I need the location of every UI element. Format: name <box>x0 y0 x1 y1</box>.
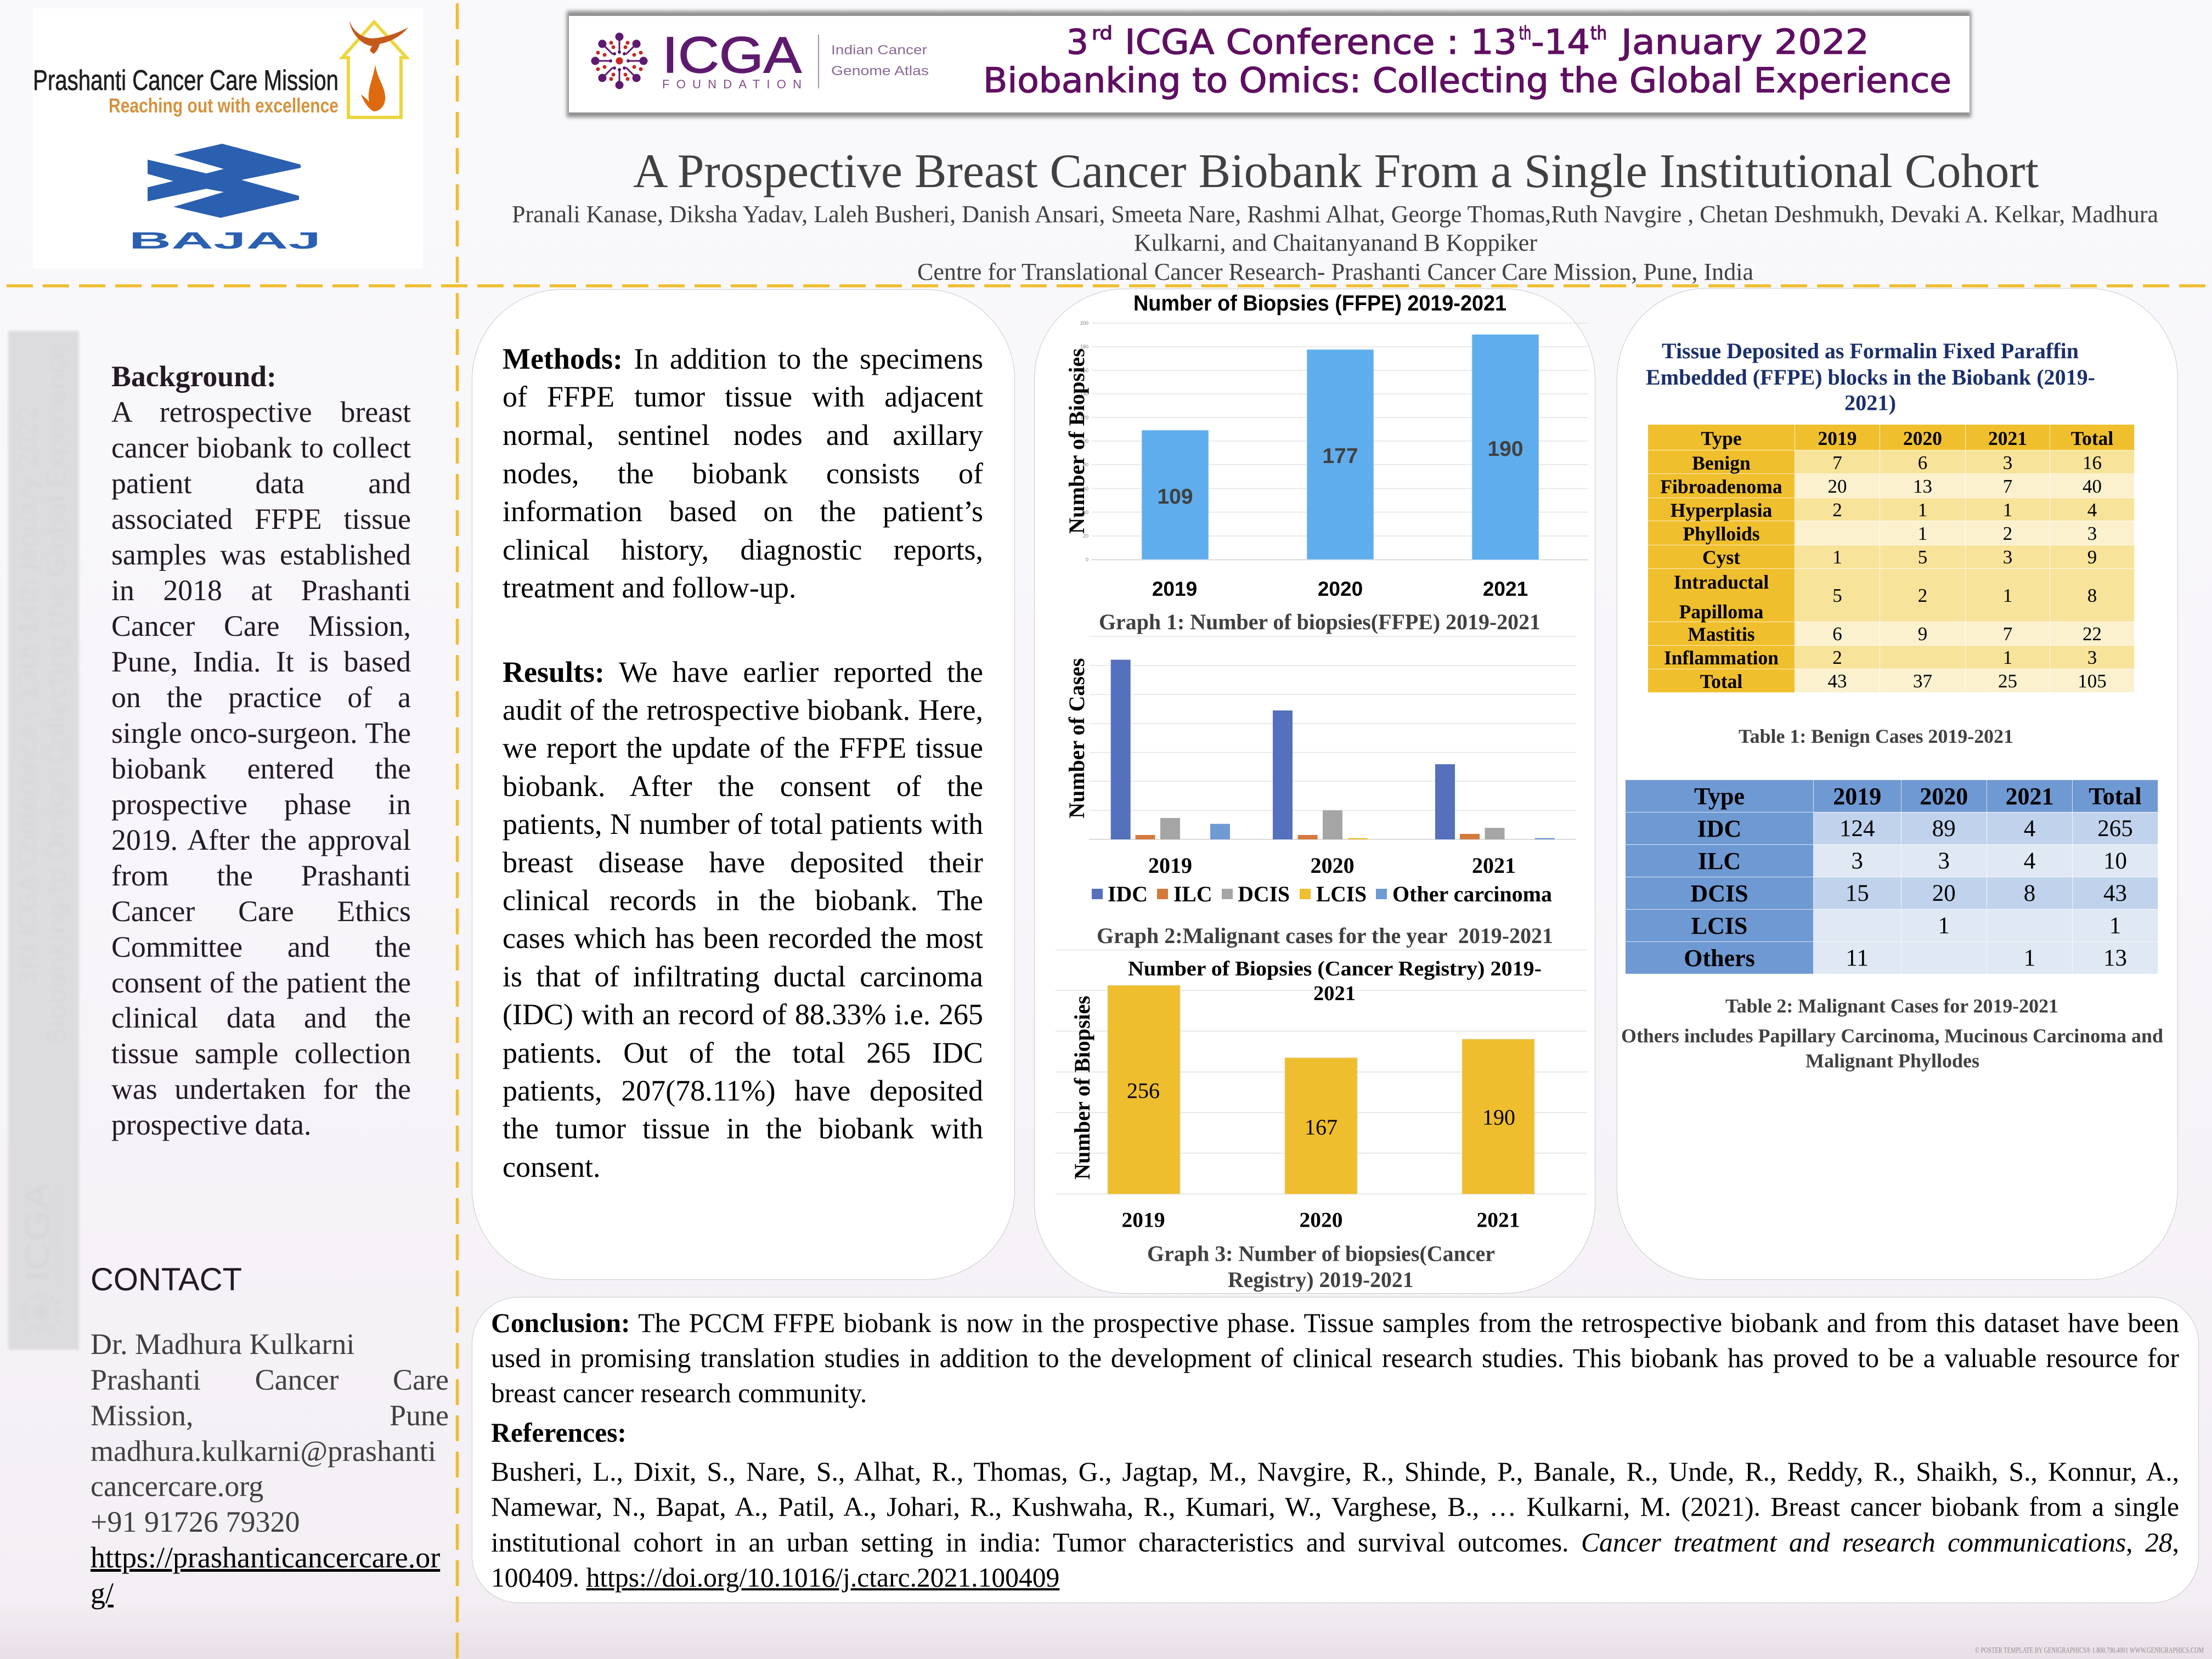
heading: contact: CONTACT <box>91 1262 242 1297</box>
caption: table 2 and note: Malignant Phyllodes <box>1805 1050 1979 1072</box>
bar chart: biopsies FFPE: 200 <box>1080 320 1088 326</box>
bar chart: biopsies FFPE: 140 <box>1080 391 1088 397</box>
bar chart: cancer registry: 2019 <box>1121 1208 1165 1232</box>
table: benign cases: Total <box>1700 670 1742 692</box>
text block: references: Namewar, N., Bapat, A., Patil, A., Johari, R., Kushwaha, R., Kumari, W., Varghese, B., … Kulkarni, M. (2021). Breast cancer biobank from a single <box>491 1492 2179 1522</box>
text block: contact details: cancercare.org <box>91 1470 263 1503</box>
text block: methods: of FFPE tumor tissue with adjacent <box>503 380 983 413</box>
caption: table 2 and note <box>1618 996 2178 1073</box>
table: benign cases: 9 <box>1918 623 1927 645</box>
text block: conclusion: used in promising translation studies in addition to the development of clinical research studies. This biobank has proved to be a valuable resource for <box>491 1343 2179 1373</box>
logo: Prashanti Cancer Care Mission: Prashanti Cancer Care Mission <box>33 65 338 97</box>
table: malignant cases: ILC <box>1698 848 1741 874</box>
text block: results: audit of the retrospective biobank. Here, <box>503 693 983 726</box>
table: benign cases: 3 <box>2087 523 2097 544</box>
text block: background: tissue sample collection <box>111 1037 411 1070</box>
text block: methods: information based on the patient’s <box>503 495 983 528</box>
table: malignant cases: 1 <box>2024 945 2035 971</box>
conference heading <box>983 22 1951 100</box>
panel: tables <box>1617 288 2178 1280</box>
text block: contact details: g/ <box>91 1577 114 1610</box>
table: benign cases: Type <box>1701 427 1742 449</box>
bar chart: biopsies FFPE: 80 <box>1083 462 1088 467</box>
caption: graph 3: Graph 3: Number of biopsies(Cancer <box>1147 1241 1495 1266</box>
text block: background: Pune, India. It is based <box>111 645 411 678</box>
text block: results: breast disease have deposited their <box>503 846 983 879</box>
text block: methods <box>503 342 983 604</box>
table: benign cases: 8 <box>2087 585 2097 606</box>
y axis title: Number of Biopsies <box>1070 996 1094 1180</box>
text block: background: Background: <box>111 360 276 393</box>
conference heading: Biobanking to Omics: Collecting the Global Experience <box>983 60 1951 100</box>
table: malignant cases: 265 <box>2097 816 2133 842</box>
caption: graph 2: Graph 2:Malignant cases for the year 2019-2021 <box>1097 923 1553 948</box>
bar chart: biopsies FFPE: 0 <box>1086 557 1088 562</box>
text block: background: prospective data. <box>111 1108 311 1141</box>
table: benign cases: 6 <box>1832 623 1842 645</box>
bar chart: cancer registry: 256 <box>1127 1079 1160 1103</box>
authors: Pranali Kanase, Diksha Yadav, Laleh Busheri, Danish Ansari, Smeeta Nare, Rashmi Alhat, George Thomas,Ruth Navgire , Chetan Deshmukh, Devaki A. Kelkar, Madhura <box>512 200 2158 228</box>
logos panel: Prashanti and Bajaj <box>33 20 410 254</box>
bars <box>1108 985 1534 1194</box>
conference heading: th <box>1590 22 1607 44</box>
authors <box>512 200 2158 256</box>
table: malignant cases: 15 <box>1846 881 1869 906</box>
text block: contact details: Dr. Madhura Kulkarni <box>91 1328 354 1361</box>
logo: Bajaj: BAJAJ <box>129 228 321 254</box>
text block: background: prospective phase in <box>111 788 411 821</box>
legend: IDC <box>1108 882 1148 906</box>
table: benign cases: 40 <box>2083 476 2102 497</box>
chart title: Number of Biopsies (FFPE) 2019-2021 <box>1133 291 1506 315</box>
text block: background: on the practice of a <box>111 681 411 714</box>
table: benign cases: 22 <box>2083 623 2102 645</box>
table: benign cases: Intraductal <box>1674 571 1769 593</box>
bar chart: biopsies FFPE: 20 <box>1083 533 1088 539</box>
y axis title: Number of Cases <box>1064 658 1089 819</box>
text block: conclusion: Conclusion: The PCCM FFPE biobank is now in the prospective phase. Tissue samples from the retrospective biobank and from this dataset have been <box>491 1308 2179 1338</box>
bar chart: biopsies FFPE: 109 <box>1157 485 1193 509</box>
table: benign cases: 2021 <box>1988 427 2027 449</box>
text block: methods: clinical history, diagnostic reports, <box>503 533 983 566</box>
legend: DCIS <box>1238 882 1290 906</box>
ICGA Foundation wordmark: Genome Atlas <box>831 64 929 78</box>
text block: results: cases which has been recorded the most <box>503 922 983 955</box>
table: malignant cases: 2020 <box>1920 783 1968 810</box>
table: benign cases: Fibroadenoma <box>1660 476 1782 498</box>
ICGA Foundation wordmark <box>662 26 929 91</box>
text block: results <box>503 655 983 1183</box>
caption: table 1: Table 1: Benign Cases 2019-2021 <box>1739 725 2013 747</box>
table: benign cases: 105 <box>2078 670 2107 692</box>
text block: background: Cancer Care Ethics <box>111 895 411 928</box>
table: malignant cases: DCIS <box>1690 880 1748 907</box>
table: malignant cases: 13 <box>2103 945 2127 971</box>
text block: background <box>111 360 411 1141</box>
bar chart: biopsies FFPE: 100 <box>1080 438 1088 444</box>
text block: results: is that of infiltrating ductal carcinoma <box>503 960 983 993</box>
ICGA Foundation wordmark: ICGA <box>662 26 802 83</box>
table: benign cases: 1 <box>1918 499 1927 521</box>
table: malignant cases: 3 <box>1851 848 1863 874</box>
table: benign cases: 9 <box>2087 546 2097 568</box>
bar chart: malignant cases: 2021 <box>1472 853 1516 878</box>
table: benign cases: Benign <box>1692 452 1751 474</box>
logo: Bajaj <box>129 144 321 254</box>
conference heading: January 2022 <box>1619 22 1869 62</box>
table: benign cases <box>1647 424 2134 693</box>
text block: results: (IDC) with an record of 88.33% i.e. 265 <box>503 998 983 1031</box>
text block: background: patient data and <box>111 467 411 500</box>
panel: graphs <box>1034 289 1595 1294</box>
panel: methods and results <box>472 289 1015 1280</box>
text block: results: Results: We have earlier reported the <box>503 655 983 688</box>
text block: references: Busheri, L., Dixit, S., Nare, S., Alhat, R., Thomas, G., Jagtap, M., Navgire, R., Shinde, P., Banale, R., Unde, R., Reddy, R., Shaikh, S., Konnur, A., <box>491 1457 2179 1487</box>
text block: results: we report the update of the FFPE tissue <box>503 731 983 764</box>
chart title: Number of Biopsies (Cancer Registry) 2019- <box>1128 957 1542 980</box>
icon: ICGA flower <box>591 33 647 89</box>
table: malignant cases: 10 <box>2103 848 2127 874</box>
text block: results: consent. <box>503 1150 600 1183</box>
bar chart: biopsies FFPE <box>1064 291 1588 600</box>
table: benign cases: 1 <box>2003 647 2012 668</box>
table: benign cases: 2 <box>2003 523 2012 544</box>
table: benign cases: Phylloids <box>1683 523 1760 545</box>
table: benign cases: 2 <box>1832 647 1842 668</box>
text block: contact details <box>91 1328 449 1610</box>
ICGA Foundation wordmark: FOUNDATION <box>662 77 802 91</box>
text block: references <box>491 1454 2179 1595</box>
table: malignant cases: 8 <box>2024 881 2035 906</box>
table: benign cases: Inflammation <box>1664 647 1779 669</box>
text block: contact details: madhura.kulkarni@prashanti <box>91 1435 436 1468</box>
text block: background: biobank entered the <box>111 752 411 785</box>
text block: background: clinical data and the <box>111 1001 411 1034</box>
text block: methods: normal, sentinel nodes and axillary <box>503 419 983 452</box>
table: malignant cases: LCIS <box>1691 912 1747 939</box>
text block: results: the tumor tissue in the biobank with <box>503 1112 983 1145</box>
text block: background: in 2018 at Prashanti <box>111 574 411 607</box>
table: benign cases: 1 <box>2003 585 2012 606</box>
chart title <box>1128 957 1542 1005</box>
bar chart: biopsies FFPE: 190 <box>1487 437 1523 461</box>
bar chart: biopsies FFPE: 60 <box>1083 486 1088 492</box>
table: malignant cases: 1 <box>1938 913 1950 939</box>
chart title: 2021 <box>1313 982 1356 1005</box>
legend <box>1092 882 1552 906</box>
table: benign cases: 6 <box>1918 452 1927 473</box>
bars <box>1142 335 1539 560</box>
table: malignant cases: 4 <box>2024 848 2035 874</box>
y axis title: Number of Biopsies <box>1064 348 1089 534</box>
bar chart: biopsies FFPE: 2020 <box>1318 578 1363 600</box>
table: malignant cases: Total <box>2089 783 2142 810</box>
bar chart: cancer registry: 167 <box>1305 1115 1338 1139</box>
table: malignant cases: 1 <box>2109 913 2121 939</box>
table: benign cases: 13 <box>1913 476 1932 497</box>
heading: tissue deposited: Tissue Deposited as Formalin Fixed Paraffin <box>1662 338 2079 363</box>
text block: contact details: Mission, Pune <box>91 1399 449 1432</box>
table: malignant cases: Type <box>1694 783 1745 810</box>
logo: Prashanti Cancer Care Mission <box>33 21 408 117</box>
conference heading: -14 <box>1531 22 1590 62</box>
text block: results: clinical records in the biobank. The <box>503 884 983 917</box>
legend: ILC <box>1173 882 1212 906</box>
table: malignant cases: 89 <box>1932 816 1956 842</box>
bar chart: cancer registry: 2021 <box>1477 1208 1520 1232</box>
table: benign cases: 7 <box>2003 623 2012 645</box>
table: benign cases: 3 <box>2003 546 2012 568</box>
sidebar: faded rotated banner: ICGA <box>19 1182 57 1282</box>
table: malignant cases: 4 <box>2024 816 2035 842</box>
bar chart: malignant cases <box>1064 636 1576 906</box>
table: benign cases: 16 <box>2083 452 2102 473</box>
legend: Other carcinoma <box>1392 882 1552 906</box>
panel: conclusion and references <box>472 1297 2199 1603</box>
table: benign cases: 1 <box>2003 499 2012 521</box>
bar chart: biopsies FFPE: 40 <box>1083 510 1088 515</box>
table: malignant cases: 3 <box>1938 848 1950 874</box>
table: benign cases: 7 <box>1832 452 1842 473</box>
table: malignant cases: 11 <box>1846 945 1869 971</box>
text block: background: Cancer Care Mission, <box>111 610 411 642</box>
table: benign cases: Hyperplasia <box>1671 499 1772 521</box>
table: malignant cases: Others <box>1684 945 1755 972</box>
conference heading: 3 <box>1066 22 1088 62</box>
caption: graph 3: Registry) 2019-2021 <box>1228 1267 1414 1292</box>
text block: background: consent of the patient the <box>111 966 411 998</box>
table: malignant cases: 2021 <box>2006 783 2054 810</box>
authors: Kulkarni, and Chaitanyanand B Koppiker <box>1134 229 1537 256</box>
bar chart: malignant cases: 2019 <box>1148 853 1192 878</box>
table: benign cases: 4 <box>2087 499 2097 521</box>
table: benign cases: 2020 <box>1903 427 1942 449</box>
heading: tissue deposited: 2021) <box>1844 391 1896 415</box>
table: benign cases: Cyst <box>1702 546 1740 568</box>
text block: conclusion: breast cancer research community. <box>491 1378 867 1408</box>
text block: contact details: +91 91726 79320 <box>91 1505 300 1538</box>
bar chart: cancer registry: 190 <box>1482 1105 1515 1130</box>
table: benign cases: 43 <box>1828 670 1847 692</box>
table: malignant cases: 20 <box>1932 881 1956 906</box>
table: malignant cases: 43 <box>2103 881 2127 906</box>
table: malignant cases <box>1625 779 2158 974</box>
text block: results: patients, N number of total patients with <box>503 808 983 840</box>
poster title and authors <box>512 148 2158 285</box>
bar chart: biopsies FFPE: 180 <box>1080 344 1088 349</box>
table: benign cases: Mastitis <box>1688 623 1755 645</box>
table: benign cases: 3 <box>2003 452 2012 473</box>
sidebar: faded rotated banner: Biobanking to Omics: Collecting the Global Experience <box>43 344 71 1045</box>
text block: background: cancer biobank to collect <box>111 431 411 464</box>
text block: results: patients, 207(78.11%) have deposited <box>503 1074 983 1107</box>
text block: background: associated FFPE tissue <box>111 503 411 535</box>
text block: methods: nodes, the biobank consists of <box>503 457 983 490</box>
bar chart: biopsies FFPE: 177 <box>1322 444 1358 468</box>
table: benign cases: 3 <box>2087 647 2097 668</box>
text block: methods: Methods: In addition to the specimens <box>503 342 983 375</box>
table: benign cases: 2019 <box>1818 427 1857 449</box>
caption: graph 1: Graph 1: Number of biopsies(FFPE) 2019-2021 <box>1099 610 1541 634</box>
bar chart: cancer registry <box>1056 950 1587 1232</box>
bars <box>1111 659 1555 839</box>
bar chart: cancer registry: 2020 <box>1299 1208 1343 1232</box>
text block: results: biobank. After the consent of the <box>503 770 983 803</box>
sidebar: faded rotated banner: FOUNDATION <box>53 1183 61 1282</box>
table: benign cases: 1 <box>1832 546 1842 568</box>
bar chart: biopsies FFPE: 2021 <box>1483 578 1528 600</box>
text block: background: single onco-surgeon. The <box>111 716 411 749</box>
text block: references: 100409. https://doi.org/10.1016/j.ctarc.2021.100409 <box>491 1562 1059 1593</box>
text block: methods: treatment and follow-up. <box>503 571 796 604</box>
bar chart: biopsies FFPE: 160 <box>1080 368 1088 373</box>
bar chart: malignant cases: 2020 <box>1311 853 1355 878</box>
text block: background: A retrospective breast <box>111 396 411 428</box>
table: malignant cases: 124 <box>1839 816 1875 842</box>
bar chart: biopsies FFPE: 2019 <box>1152 578 1197 600</box>
heading: tissue deposited: Embedded (FFPE) blocks in the Biobank (2019- <box>1646 365 2095 390</box>
table: malignant cases: 2019 <box>1833 783 1881 810</box>
conference heading: rd <box>1092 22 1113 44</box>
table: benign cases: 2 <box>1918 585 1927 606</box>
text block: contact details: Prashanti Cancer Care <box>91 1363 449 1396</box>
heading: tissue deposited <box>1646 338 2095 415</box>
logo: Prashanti Cancer Care Mission: Reaching out with excellence <box>109 94 338 117</box>
table: benign cases: 5 <box>1918 546 1927 568</box>
text block: background: was undertaken for the <box>111 1073 411 1105</box>
conference heading: ICGA Conference : 13 <box>1125 22 1517 62</box>
caption: graph 3 <box>1147 1241 1495 1292</box>
legend: LCIS <box>1316 882 1367 906</box>
text block: background: Committee and the <box>111 930 411 963</box>
heading: references: References: <box>491 1418 627 1447</box>
table: malignant cases: IDC <box>1697 815 1741 842</box>
ICGA Foundation wordmark: Indian Cancer <box>831 43 927 58</box>
table: benign cases: 5 <box>1832 585 1842 606</box>
table: benign cases: 20 <box>1828 476 1847 497</box>
sidebar: faded rotated banner: 3rd ICGA Conference : 13th-14th January 2022 <box>14 405 42 986</box>
text block: results: patients. Out of the total 265 IDC <box>503 1036 983 1069</box>
bar chart: biopsies FFPE: 120 <box>1080 415 1088 420</box>
table: benign cases: Total <box>2071 427 2113 449</box>
text block: contact details: https://prashanticancercare.or <box>91 1541 440 1574</box>
charts overlay <box>1056 291 1588 1292</box>
table: benign cases: Papilloma <box>1679 601 1763 623</box>
text block: background: from the Prashanti <box>111 859 411 892</box>
sidebar: faded rotated banner <box>8 330 80 1350</box>
table: benign cases: 1 <box>1918 523 1927 544</box>
text block: conclusion <box>491 1306 2179 1411</box>
affiliation: Centre for Translational Cancer Research- Prashanti Cancer Care Mission, Pune, India <box>917 258 1753 285</box>
text block: background: samples was established <box>111 538 411 571</box>
table: benign cases: 2 <box>1832 499 1842 521</box>
conference banner <box>564 9 1974 120</box>
caption: table 2 and note: Others includes Papillary Carcinoma, Mucinous Carcinoma and <box>1621 1025 2163 1047</box>
table: benign cases: 7 <box>2003 476 2012 497</box>
table: benign cases: 25 <box>1998 670 2017 692</box>
table: benign cases: 37 <box>1913 670 1932 692</box>
conference heading: th <box>1519 22 1531 44</box>
text block: references: institutional cohort in an urban setting in india: Tumor characteristics and survival outcomes. Cancer treatment and research communications, 28, <box>491 1527 2179 1558</box>
text block: background: 2019. After the approval <box>111 823 411 856</box>
